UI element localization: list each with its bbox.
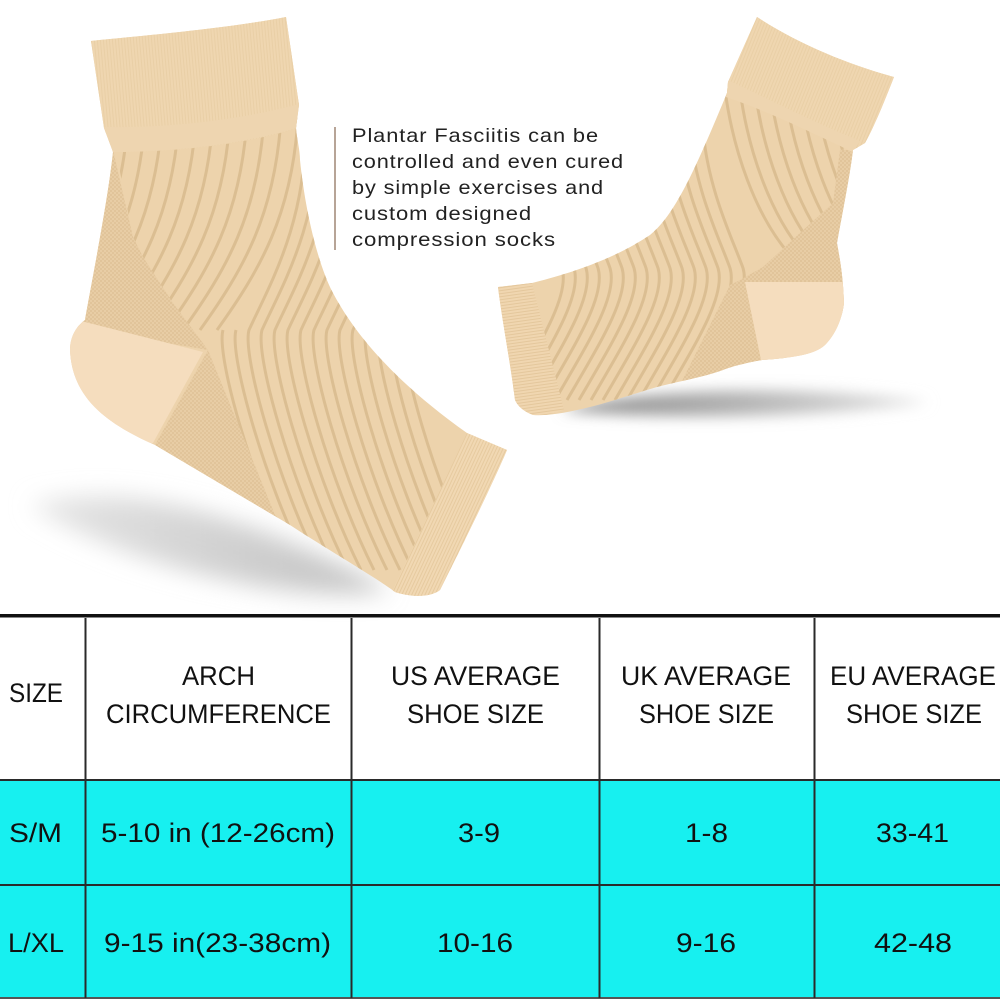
right sock diagonal stripes (513, 93, 858, 400)
table row: L/XL: L/XL (8, 928, 64, 958)
shadow: left sock (30, 496, 390, 593)
table row: S/M: S/M (9, 818, 62, 848)
sock: left (70, 17, 507, 596)
table header row: SHOE SIZE (407, 699, 544, 729)
right sock mesh panels (682, 150, 853, 381)
table row: L/XL (8, 928, 952, 958)
table header row: SHOE SIZE (639, 699, 774, 729)
table row fills (0, 780, 1000, 998)
callout: plantar fasciitis text: controlled and even cured (352, 151, 624, 173)
left sock toe band (393, 433, 507, 596)
table row: S/M: 1-8 (685, 818, 728, 848)
table header row: SIZE (9, 678, 63, 708)
right sock heel patch (745, 282, 844, 360)
callout: plantar fasciitis text: compression socks (352, 229, 556, 251)
sock: right (498, 17, 894, 416)
size table (0, 614, 1000, 999)
callout: plantar fasciitis text: by simple exercises and (352, 177, 604, 199)
left sock mesh panels (78, 150, 278, 518)
left sock cuff (91, 17, 299, 151)
table row: S/M (9, 818, 949, 848)
callout: plantar fasciitis text: Plantar Fasciitis can be (352, 125, 599, 147)
left sock heel patch (70, 322, 203, 443)
table header row: UK AVERAGE (621, 661, 791, 691)
table row: L/XL: 9-16 (676, 928, 736, 958)
right sock toe band (498, 283, 564, 416)
table header row: US AVERAGE (391, 661, 560, 691)
shadow: right sock (560, 391, 930, 416)
table header row: EU AVERAGE (830, 661, 996, 691)
table header row (9, 661, 996, 729)
callout: plantar fasciitis text (334, 125, 624, 251)
table row: S/M: 33-41 (876, 818, 949, 848)
table header row: ARCH (182, 661, 255, 691)
right sock cuff fold (726, 80, 860, 152)
table header row: CIRCUMFERENCE (106, 699, 331, 729)
table row: L/XL: 10-16 (437, 928, 513, 958)
table row: S/M: 3-9 (458, 818, 500, 848)
left sock cuff fold (104, 104, 299, 152)
table row: L/XL: 9-15 in(23-38cm) (104, 928, 331, 958)
table row: S/M: 5-10 in (12-26cm) (101, 818, 335, 848)
table row: L/XL: 42-48 (874, 928, 952, 958)
callout: plantar fasciitis text: custom designed (352, 203, 532, 225)
right sock cuff (726, 10, 900, 152)
left sock diagonal stripes (120, 118, 465, 570)
table header row: SHOE SIZE (846, 699, 982, 729)
